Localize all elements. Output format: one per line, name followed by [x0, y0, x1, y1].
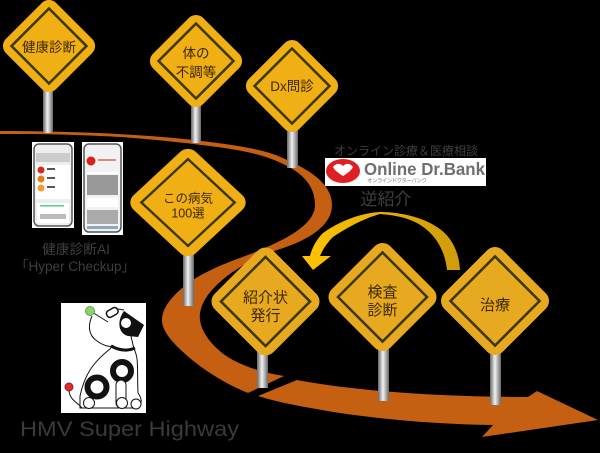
logo: Online Dr.Bank: オンラインドクターバンク [367, 176, 427, 184]
sign: treatment: 治療 [480, 297, 510, 314]
sign: treatment [436, 242, 554, 360]
caption: health checkup AI [15, 241, 135, 274]
road: winding upper section [0, 131, 332, 393]
pole: 100 diseases [183, 250, 194, 306]
sign: symptoms: 不調等 [176, 64, 216, 80]
phone screenshot: checkup results [32, 142, 74, 228]
sign: 100 diseases: 100選 [171, 206, 205, 220]
phone screenshot: disease details [82, 142, 123, 235]
caption: health checkup AI: 「Hyper Checkup」 [15, 259, 135, 274]
sign: symptoms: 体の [182, 46, 210, 61]
sign: Dx interview [242, 36, 342, 136]
sign: 100 diseases [126, 145, 250, 260]
sign: health checkup [0, 0, 99, 96]
sign: referral letter: 紹介状 [243, 290, 288, 306]
sign: examination: 診断 [367, 302, 398, 319]
sign: Dx interview: Dx問診 [270, 79, 314, 94]
pole: examination [378, 345, 389, 401]
pole: health checkup [43, 85, 53, 133]
curved arrow: reverse referral [302, 212, 460, 270]
sign: examination: 検査 [367, 284, 398, 301]
sign: examination [324, 238, 441, 356]
title: HMV Super Highway: HMV Super Highway [20, 418, 240, 441]
pole: treatment [490, 350, 501, 405]
road: arrow toward the right [258, 380, 598, 437]
pole: symptoms [191, 100, 201, 143]
robot dog illustration [61, 303, 146, 413]
pole: Dx interview [287, 125, 298, 168]
caption: reverse referral: 逆紹介 [360, 190, 412, 209]
sign: referral letter [207, 243, 324, 360]
logo: Online Dr.Bank: Online Dr.Bank [364, 159, 485, 179]
sign: health checkup: 健康診断 [22, 39, 76, 55]
sign: referral letter: 発行 [250, 308, 281, 324]
logo: Online Dr.Bank [325, 158, 486, 186]
sign: 100 diseases: この病気 [163, 190, 213, 206]
pole: referral letter [257, 350, 268, 388]
sign: symptoms [146, 11, 246, 111]
caption: health checkup AI: 健康診断AI [42, 241, 110, 257]
caption: online consultation: オンライン診療＆医療相談 [334, 143, 478, 158]
